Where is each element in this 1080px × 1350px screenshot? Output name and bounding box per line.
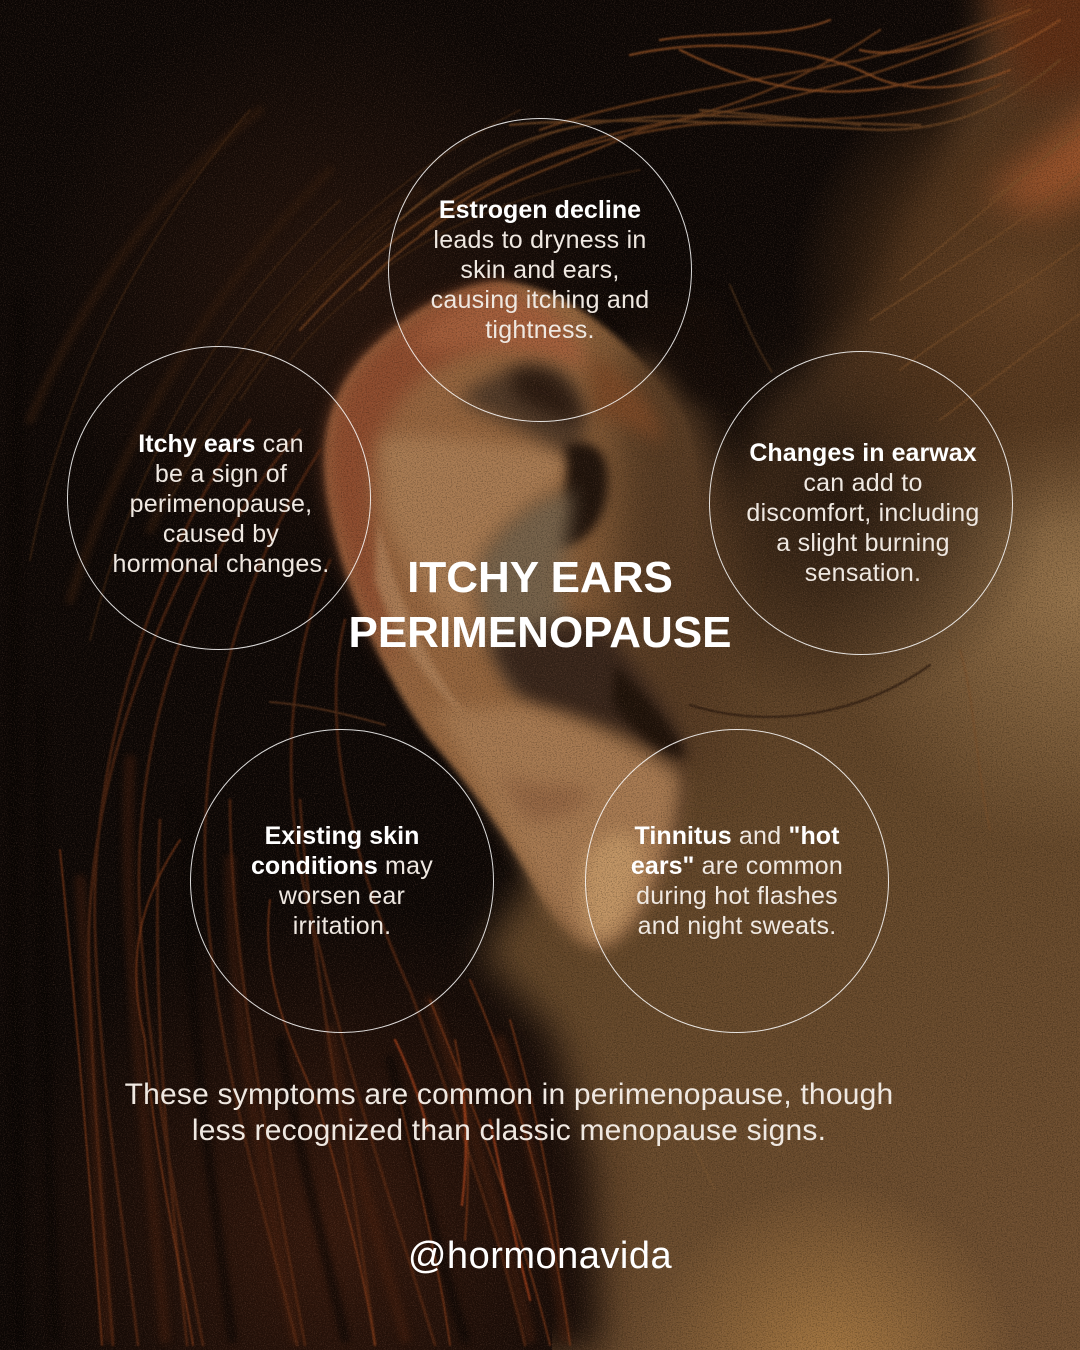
circle: changes in earwax xyxy=(709,351,1013,655)
dark hair over upper right edge xyxy=(590,300,740,400)
text: tinnitus: Tinnitus and "hot xyxy=(635,822,839,850)
ear base shape xyxy=(325,282,698,949)
ear xyxy=(325,282,740,949)
title: PERIMENOPAUSE xyxy=(348,608,732,657)
right hair fine strands xyxy=(730,120,1080,830)
text: tinnitus: and night sweats. xyxy=(638,912,836,940)
top sweep strands xyxy=(300,5,1040,330)
text: tinnitus xyxy=(631,822,843,940)
footer text xyxy=(125,1078,893,1147)
top right hair xyxy=(985,0,1080,215)
text: itchy ears: caused by xyxy=(163,520,279,548)
text: changes in earwax: can add to xyxy=(803,469,923,497)
top fold orange xyxy=(590,355,665,445)
circle: itchy ears xyxy=(67,346,371,650)
text: tinnitus: ears" are common xyxy=(631,852,843,880)
footer text: These symptoms are common in perimenopause, though xyxy=(125,1078,893,1111)
title xyxy=(348,553,732,657)
footer text: less recognized than classic menopause signs. xyxy=(192,1114,826,1147)
left hair dark red xyxy=(88,420,525,1345)
text: itchy ears: Itchy ears can xyxy=(138,430,304,458)
text: estrogen decline xyxy=(431,196,649,344)
circle: tinnitus xyxy=(585,729,889,1033)
text: estrogen decline: skin and ears, xyxy=(460,256,620,284)
text: itchy ears xyxy=(113,430,329,578)
strands across neck xyxy=(690,665,930,717)
helix red shading xyxy=(327,284,510,670)
circle: estrogen decline xyxy=(388,118,692,422)
text: itchy ears: perimenopause, xyxy=(130,490,312,518)
text: itchy ears: hormonal changes. xyxy=(113,550,329,578)
text: existing skin conditions: worsen ear xyxy=(279,882,405,910)
text: existing skin conditions: irritation. xyxy=(293,912,391,940)
text: existing skin conditions xyxy=(251,822,433,940)
text: changes in earwax xyxy=(746,439,980,587)
text: estrogen decline: Estrogen decline xyxy=(439,196,641,224)
upper-left faint strands xyxy=(30,110,640,640)
concha grey xyxy=(478,490,572,690)
helix lower highlight xyxy=(375,520,465,715)
title: ITCHY EARS xyxy=(407,553,673,602)
text: changes in earwax: sensation. xyxy=(805,559,921,587)
antihelix light band xyxy=(380,437,575,650)
text: estrogen decline: tightness. xyxy=(485,316,595,344)
text: changes in earwax: discomfort, including xyxy=(746,499,980,527)
upper hollow xyxy=(458,367,584,460)
text: estrogen decline: leads to dryness in xyxy=(433,226,647,254)
dark crease xyxy=(540,443,608,548)
text: existing skin conditions: Existing skin xyxy=(265,822,419,850)
lobe xyxy=(430,700,680,947)
right side soft blend xyxy=(620,340,730,780)
text: changes in earwax: Changes in earwax xyxy=(749,439,977,467)
text: existing skin conditions: conditions may xyxy=(251,852,433,880)
left hair broad streaks xyxy=(14,110,565,1338)
text: tinnitus: during hot flashes xyxy=(636,882,838,910)
text: changes in earwax: a slight burning xyxy=(776,529,950,557)
text: itchy ears: be a sign of xyxy=(155,460,287,488)
handle: @hormonavida xyxy=(408,1235,672,1277)
lower concha dark xyxy=(485,620,690,762)
circle: existing skin conditions xyxy=(190,729,494,1033)
text: estrogen decline: causing itching and xyxy=(431,286,649,314)
